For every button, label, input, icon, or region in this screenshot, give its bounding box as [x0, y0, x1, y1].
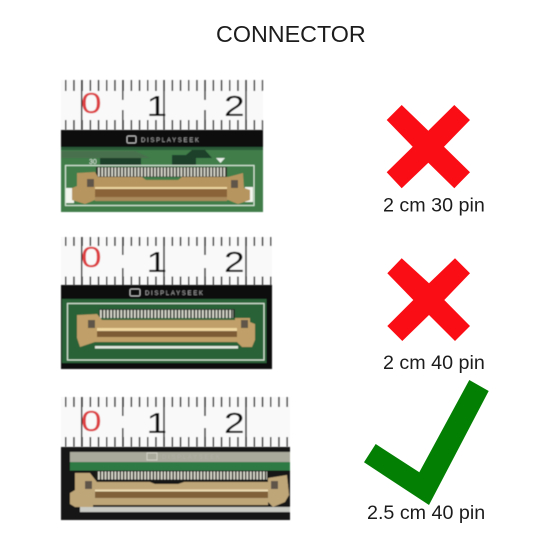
ruler 2: 2: [224, 247, 245, 279]
icon: green check mark: [364, 380, 489, 505]
label: 2.5 cm 40 pin: 2.5 cm 40 pin: [367, 502, 485, 524]
board marker triangle: [216, 158, 225, 163]
panel: 2.5 cm 40 pin connector photo: [61, 397, 290, 520]
ruler 3: [61, 397, 290, 447]
connector board 1: [61, 130, 263, 212]
board label: 30: 30: [89, 159, 97, 166]
ruler 1: 1: [146, 91, 167, 123]
ruler 3: 2: [224, 408, 245, 440]
connector board 2: [61, 285, 272, 369]
ruler 2: 1: [146, 247, 167, 279]
ruler 2: 0: [81, 242, 102, 274]
brand logo: [147, 453, 157, 460]
ruler 3: 0: [81, 406, 102, 438]
label: 2 cm 30 pin: 2 cm 30 pin: [383, 195, 485, 217]
brand text: DISPLAYSEEK: [145, 291, 205, 297]
title: CONNECTOR: [216, 21, 366, 47]
ruler 2: [61, 237, 272, 286]
panel: 2 cm 30 pin connector photo: [61, 80, 263, 212]
connector board 3: [61, 447, 290, 520]
icon: red cross 1: [387, 105, 470, 188]
brand text: DISPLAYSEEK: [162, 455, 222, 461]
ruler 1: [61, 80, 263, 130]
ruler 1: 0: [81, 88, 102, 120]
panel: 2 cm 40 pin connector photo: [61, 237, 272, 369]
brand logo: [127, 136, 136, 143]
ruler 1: 2: [224, 91, 245, 123]
label: 2 cm 40 pin: 2 cm 40 pin: [383, 352, 485, 374]
brand logo: [130, 289, 140, 296]
brand text: DISPLAYSEEK: [141, 138, 201, 144]
icon: red cross 2: [387, 258, 470, 341]
ruler 3: 1: [146, 408, 167, 440]
